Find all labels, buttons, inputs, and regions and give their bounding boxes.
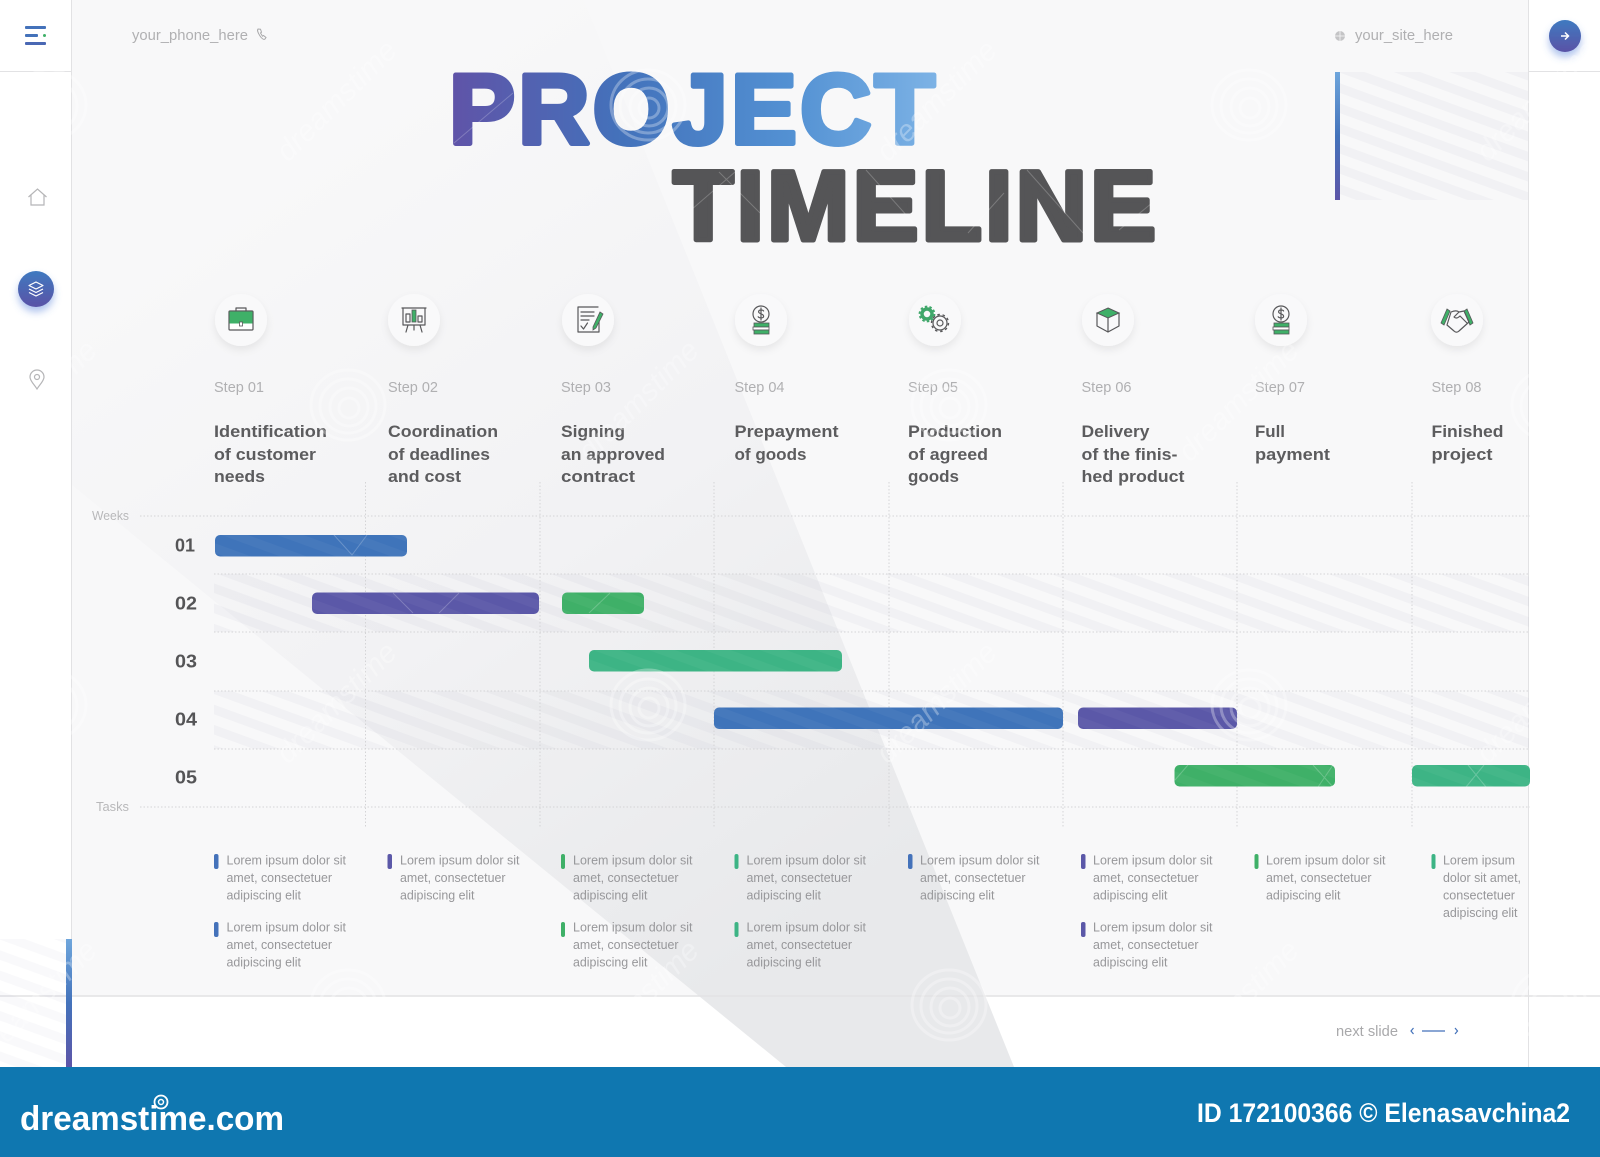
tasks column 8: dolor sit amet, (1443, 870, 1521, 885)
bar: step 05 week 04 (714, 708, 1063, 729)
tasks column 3: adipiscing elit (573, 888, 648, 902)
step 05 heading: of agreed (908, 445, 988, 464)
sidebar location pin icon (30, 370, 44, 389)
step 02 heading: of deadlines (388, 445, 490, 464)
tasks column 3: amet, consectetuer (573, 937, 679, 952)
main content panel (72, 0, 1529, 996)
title word: TIMELINE: TIMELINE (673, 150, 1156, 261)
watermark text: dreamstime (870, 636, 1004, 770)
tasks column 2: Lorem ipsum dolor sit (400, 852, 520, 868)
watermark diagonal lines (334, 93, 1486, 787)
step 06 heading: hed product (1082, 467, 1185, 486)
watermark text: dreamstime (270, 636, 404, 770)
tasks column 2 (388, 852, 520, 902)
step 05 heading (908, 422, 1002, 486)
sidebar layers button (18, 271, 54, 307)
step labels (214, 379, 1482, 396)
week numbers: 04 (175, 710, 197, 730)
step 03 heading: contract (561, 467, 635, 486)
week numbers: 03 (175, 652, 197, 672)
next slide control: next slide (1336, 1023, 1398, 1040)
step 02 icon: presentation chart (388, 294, 440, 346)
tasks column 4: amet, consectetuer (746, 937, 853, 952)
tasks column 6: amet, consectetuer (1093, 870, 1199, 885)
tasks column 8: adipiscing elit (1443, 905, 1518, 920)
step 05 icon: gears (909, 294, 961, 346)
step 07 heading: payment (1255, 445, 1330, 464)
diagonal grey background shape (72, 0, 1014, 1067)
tasks column 4 (734, 852, 866, 970)
tasks column 7 (1254, 852, 1386, 902)
step 01 heading: of customer (214, 445, 316, 464)
tasks column 8: consectetuer (1443, 888, 1516, 902)
website contact: your_site_here (1355, 27, 1453, 44)
tasks column 4: Lorem ipsum dolor sit (746, 920, 866, 934)
step labels: Step 07 (1255, 379, 1305, 396)
step 05 heading: goods (908, 467, 959, 486)
step labels: Step 02 (388, 379, 438, 396)
step 08 heading: Finished (1432, 422, 1504, 441)
grid lines (140, 482, 1530, 827)
step labels: Step 01 (214, 379, 264, 396)
tasks column 1 (214, 852, 346, 970)
step 01 icon: briefcase (215, 294, 267, 346)
bar: step 03 week 02 (562, 592, 644, 614)
bar: step 01 week 01 (215, 535, 407, 556)
watermark text: dreamstime (270, 34, 404, 168)
step labels: Step 06 (1082, 379, 1132, 396)
tasks column 1: Lorem ipsum dolor sit (226, 920, 346, 934)
next slide control (1336, 1023, 1458, 1040)
bar: step 08 week 05 (1412, 765, 1530, 786)
step 02 heading (388, 422, 498, 486)
tasks column 5: amet, consectetuer (920, 870, 1026, 885)
watermark text: dreamstime (1172, 334, 1306, 468)
step 08 icon: handshake (1431, 294, 1483, 346)
tasks column 6: Lorem ipsum dolor sit (1093, 852, 1213, 868)
bar: step 04 week 03 (589, 650, 842, 672)
footer banner (0, 1067, 1600, 1157)
week numbers: 01 (175, 536, 195, 556)
image id and credit: ID 172100366 © Elenasavchina2 (1197, 1098, 1570, 1128)
bar: step 06 week 04 (1078, 708, 1237, 729)
step 01 heading: needs (214, 467, 265, 486)
dreamstime logo: dreamstime.com (20, 1100, 284, 1138)
step 06 heading: Delivery (1082, 422, 1150, 441)
tasks column 7: adipiscing elit (1266, 888, 1341, 902)
step 06 heading: of the finis- (1082, 445, 1178, 464)
watermark text: dreamstime (1470, 636, 1600, 770)
step 06 icon: box (1082, 294, 1134, 346)
striped row bands (214, 574, 1529, 749)
step 03 heading (561, 422, 665, 486)
step 02 heading: Coordination (388, 422, 498, 441)
tasks column 1: amet, consectetuer (226, 870, 333, 885)
week numbers: 02 (175, 594, 197, 614)
step 01 heading: Identification (214, 422, 327, 441)
tasks column 3: Lorem ipsum dolor sit (573, 920, 693, 934)
axis label: weeks: Weeks (92, 508, 129, 523)
bar: step 07 week 05 (1174, 765, 1335, 786)
bar stripes overlay (215, 535, 1530, 786)
tasks column 3: Lorem ipsum dolor sit (573, 852, 693, 868)
step 02 heading: and cost (388, 467, 461, 486)
tasks column 8 (1432, 852, 1521, 920)
step 07 heading (1255, 422, 1330, 464)
tasks column 3 (561, 852, 693, 970)
watermark text: dreamstime (572, 934, 706, 1068)
tasks column 6: amet, consectetuer (1093, 937, 1199, 952)
tasks column 3: adipiscing elit (573, 954, 648, 970)
step labels: Step 05 (908, 379, 958, 396)
tasks column 6: Lorem ipsum dolor sit (1093, 920, 1213, 934)
step 01 heading (214, 422, 327, 486)
step labels: Step 04 (734, 379, 784, 396)
watermark text: dreamstime (870, 34, 1004, 168)
watermark text: dreamstime (1172, 934, 1306, 1068)
gantt chart (92, 482, 1530, 827)
tasks column 4: Lorem ipsum dolor sit (746, 852, 866, 868)
tasks column 1: adipiscing elit (226, 954, 301, 970)
step 07 icon: coin and money (1255, 294, 1307, 346)
step 06 heading (1082, 422, 1185, 486)
striped decoration top right (1335, 72, 1528, 200)
bar: step 02 week 02 (312, 592, 539, 614)
tasks column 1: amet, consectetuer (226, 937, 333, 952)
tasks column 4: adipiscing elit (746, 954, 821, 970)
step 04 heading: of goods (734, 445, 806, 464)
tasks column 5: adipiscing elit (920, 888, 995, 902)
title word: PROJECT: PROJECT (449, 54, 935, 164)
step 05 heading: Production (908, 422, 1002, 441)
tasks column 6 (1081, 852, 1213, 970)
tasks column 1: adipiscing elit (226, 888, 301, 902)
step 08 heading: project (1432, 445, 1493, 464)
step labels: Step 08 (1432, 379, 1482, 396)
tasks column 2: adipiscing elit (400, 888, 475, 902)
step 04 heading: Prepayment (734, 422, 839, 441)
tasks column 1: Lorem ipsum dolor sit (226, 852, 346, 868)
watermark text: dreamstime (572, 334, 706, 468)
step 03 heading: an approved (561, 445, 665, 464)
tasks column 6: adipiscing elit (1093, 888, 1168, 902)
striped decoration bottom left (0, 939, 72, 1067)
step 03 heading: Signing (561, 422, 625, 441)
week numbers (175, 536, 197, 788)
next button top right (1549, 20, 1581, 52)
tasks column 5: Lorem ipsum dolor sit (920, 852, 1040, 868)
step 07 heading: Full (1255, 422, 1285, 441)
watermark text: dreamstime (1470, 34, 1600, 168)
step 04 icon: coin and money (735, 294, 787, 346)
step 03 icon: signed contract (562, 294, 614, 346)
tasks column 7: Lorem ipsum dolor sit (1266, 852, 1386, 868)
tasks column 3: amet, consectetuer (573, 870, 679, 885)
sidebar home icon (28, 189, 46, 205)
step 08 heading (1432, 422, 1504, 464)
tasks column 8: Lorem ipsum (1443, 852, 1515, 868)
title (449, 54, 1156, 261)
week numbers: 05 (175, 768, 197, 788)
tasks column 2: amet, consectetuer (400, 870, 506, 885)
axis label: tasks: Tasks (96, 799, 129, 814)
tasks column 6: adipiscing elit (1093, 954, 1168, 970)
step 04 heading (734, 422, 839, 464)
tasks column 4: adipiscing elit (746, 888, 821, 902)
phone contact: your_phone_here (132, 27, 248, 44)
tasks column 4: amet, consectetuer (746, 870, 853, 885)
step labels: Step 03 (561, 379, 611, 396)
tasks column 7: amet, consectetuer (1266, 870, 1372, 885)
tasks column 5 (908, 852, 1040, 902)
sidebar hamburger icon (25, 26, 46, 45)
